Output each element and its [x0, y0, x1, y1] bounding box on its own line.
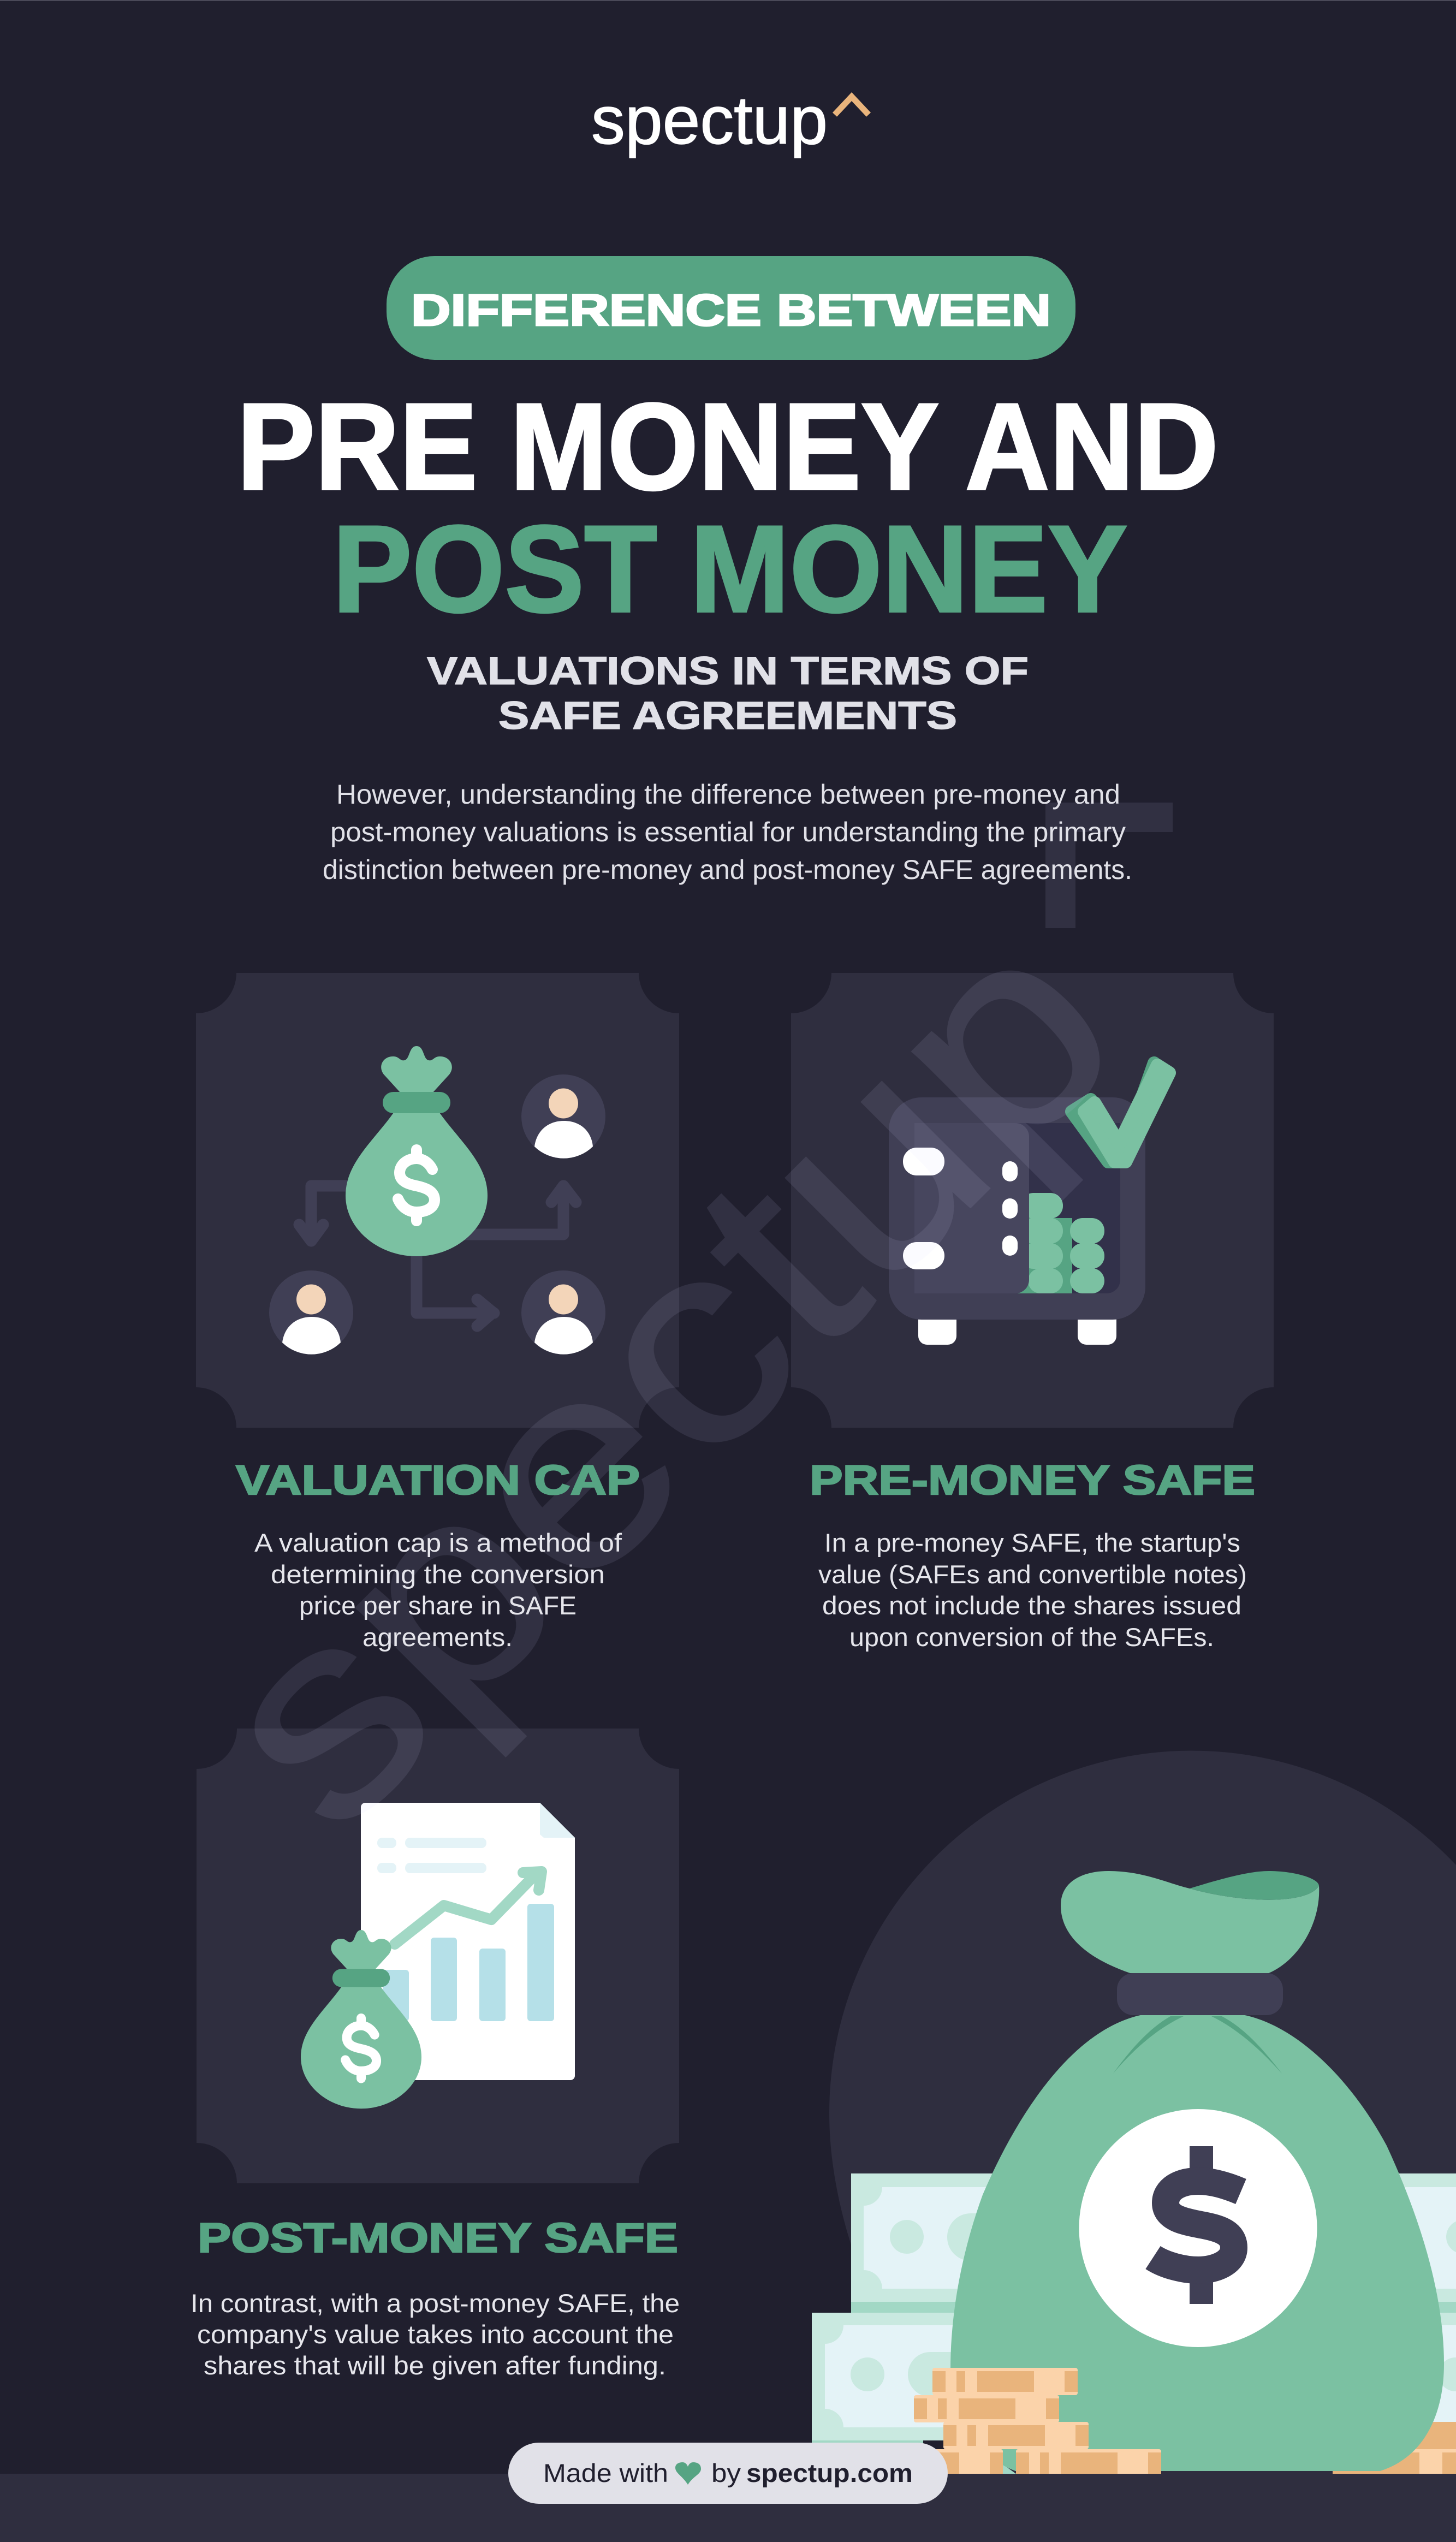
panel: post-money safe background [197, 1729, 679, 2183]
document lines [377, 1838, 486, 1873]
intro paragraph: post-money valuations is essential for understanding the primary [330, 817, 1126, 847]
intro paragraph: distinction between pre-money and post-money SAFE agreements. [323, 854, 1132, 885]
heading: post-money safe: POST-MONEY SAFE [198, 2215, 678, 2261]
dollar badge [1079, 2109, 1317, 2347]
logo: spectup [591, 83, 828, 158]
watermark: spectup [152, 864, 1175, 1887]
subtitle: VALUATIONS IN TERMS OF [427, 650, 1029, 693]
bag tie [1117, 1973, 1283, 2015]
text: post-money safe: In contrast, with a post-money SAFE, the [191, 2289, 680, 2318]
safe handles [903, 1148, 1018, 1269]
panel: pre-money safe background [791, 973, 1274, 1428]
coin stack [858, 2368, 1161, 2474]
panel: valuation cap background [196, 973, 679, 1428]
backdrop circle [829, 1751, 1456, 2474]
title: POST MONEY [332, 500, 1127, 638]
bag body [950, 2015, 1444, 2471]
title: PRE MONEY AND [237, 377, 1219, 515]
trend arrow [395, 1872, 542, 1944]
coins right [1333, 2422, 1456, 2474]
icon: heart [675, 2462, 701, 2485]
bars [383, 1904, 554, 2021]
bag top [1061, 1871, 1319, 1973]
document [361, 1803, 575, 2080]
text: valuation cap: A valuation cap is a method of [254, 1528, 622, 1557]
safe body [889, 1097, 1145, 1320]
footer badge: Made with [543, 2458, 668, 2487]
illustration: big money bag with cash and coins [812, 1751, 1456, 2474]
people [269, 1074, 605, 1355]
text: pre-money safe: upon conversion of the SAFEs. [849, 1623, 1214, 1652]
icon: safe with coins and check mark [889, 1063, 1169, 1345]
text: valuation cap: agreements. [362, 1623, 513, 1652]
cash stack left [812, 2173, 1018, 2474]
text: valuation cap [254, 1528, 622, 1652]
footer badge: by [711, 2458, 741, 2487]
heading: valuation cap: VALUATION CAP [236, 1457, 640, 1504]
footer badge [508, 2443, 948, 2504]
cash stack right [1338, 2173, 1456, 2440]
intro paragraph: However, understanding the difference between pre-money and [336, 779, 1120, 810]
footer badge: spectup.com [746, 2458, 913, 2487]
coins [1018, 1193, 1104, 1293]
safe door [914, 1123, 1029, 1293]
badge: difference between [387, 256, 1075, 360]
bag folds [1113, 2016, 1282, 2074]
subtitle [427, 650, 1029, 738]
subtitle: SAFE AGREEMENTS [498, 694, 957, 738]
heading: pre-money safe: PRE-MONEY SAFE [810, 1457, 1255, 1504]
page fold [540, 1803, 575, 1838]
text: post-money safe [191, 2289, 680, 2380]
title [237, 377, 1219, 638]
money bag [346, 1046, 488, 1256]
text: pre-money safe: In a pre-money SAFE, the startup's [824, 1528, 1240, 1557]
money bag [301, 1930, 421, 2109]
icon: report document with money bag [301, 1803, 575, 2109]
text: pre-money safe: value (SAFEs and convertible notes) [818, 1560, 1247, 1589]
bag opening [1190, 1871, 1319, 1900]
safe interior [914, 1123, 1120, 1293]
text: valuation cap: price per share in SAFE [299, 1591, 577, 1620]
badge: difference between: DIFFERENCE BETWEEN [411, 286, 1051, 335]
text: post-money safe: company's value takes into account the [197, 2320, 674, 2349]
arrows [299, 1186, 576, 1326]
text: valuation cap: determining the conversion [271, 1560, 605, 1589]
text: pre-money safe [818, 1528, 1247, 1652]
floor band [0, 2474, 1456, 2542]
safe feet [918, 1310, 1116, 1345]
check mark [1072, 1063, 1169, 1162]
text: post-money safe: shares that will be given after funding. [204, 2351, 666, 2380]
intro paragraph [323, 779, 1132, 885]
text: pre-money safe: does not include the shares issued [822, 1591, 1241, 1620]
icon: money bag distributing to people [269, 1046, 605, 1355]
